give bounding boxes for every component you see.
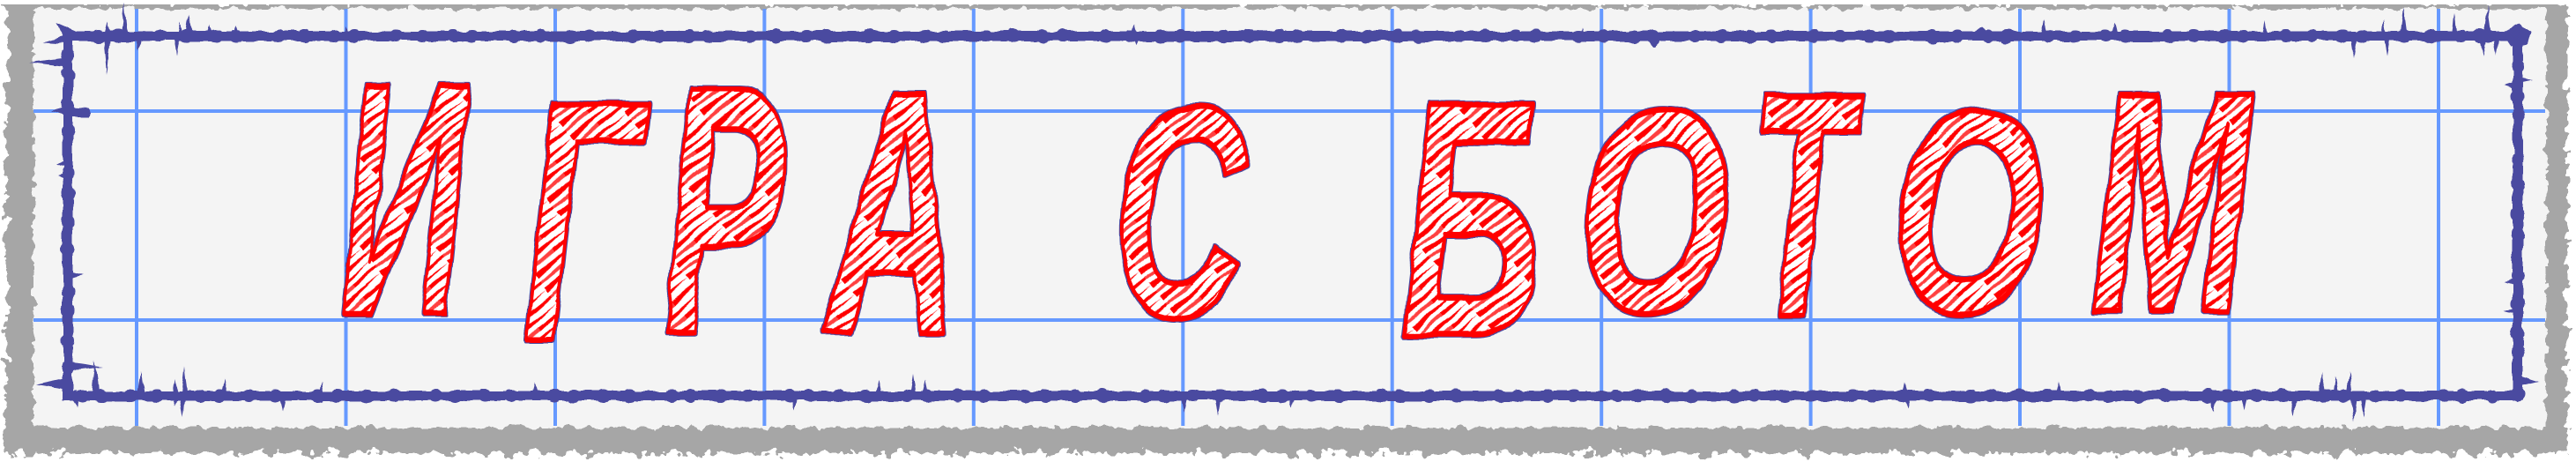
- title: ИГРА С БОТОМ: Г: [523, 31, 650, 411]
- title: ИГРА С БОТОМ: О: [1578, 52, 1729, 373]
- title: ИГРА С БОТОМ: О: [1891, 52, 2045, 373]
- title: ИГРА С БОТОМ: М: [2091, 27, 2255, 377]
- title: ИГРА С БОТОМ: [340, 12, 2255, 411]
- title: ИГРА С БОТОМ: Р: [664, 12, 785, 406]
- title: ИГРА С БОТОМ: А: [820, 18, 960, 407]
- title: ИГРА С БОТОМ: Б: [1401, 32, 1540, 406]
- title: ИГРА С БОТОМ: И: [340, 13, 471, 384]
- title: ИГРА С БОТОМ: С: [1112, 45, 1250, 380]
- title: ИГРА С БОТОМ: Т: [1750, 26, 1864, 384]
